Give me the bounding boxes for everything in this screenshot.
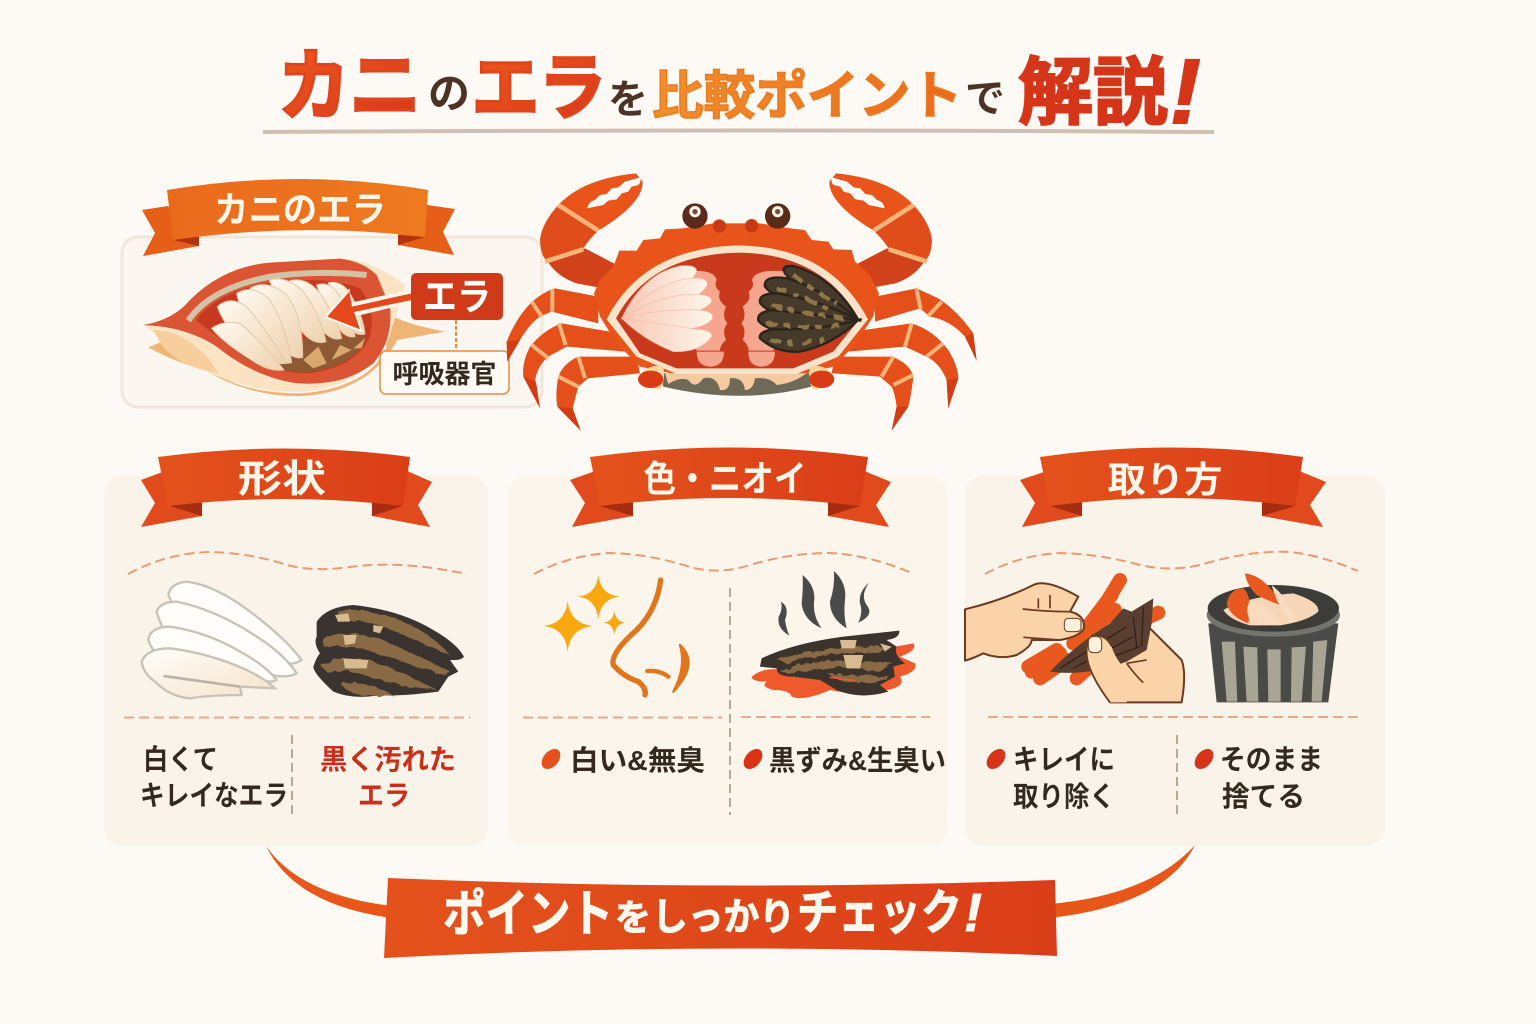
ribbon: shape heading: 形状 — [238, 459, 326, 501]
shell window — [607, 245, 868, 374]
pink lobes — [673, 271, 793, 367]
title: カニ — [278, 42, 421, 130]
ribbon: removal heading — [1020, 448, 1326, 527]
text: throw away — [1191, 744, 1323, 812]
dashed dividers — [523, 716, 930, 718]
title: エラ — [472, 49, 606, 129]
icon: trash can — [1207, 573, 1340, 702]
bottom banner: チェック — [797, 887, 962, 940]
icon: sparkles and nose — [544, 575, 689, 695]
text: remove cleanly: 取り除く — [1013, 781, 1115, 812]
connector line — [455, 320, 457, 350]
title: で — [965, 77, 1005, 121]
text: remove cleanly — [983, 744, 1115, 812]
text: dirty gill: エラ — [358, 780, 410, 811]
text: dark and smelly: 黒ずみ&生臭い — [769, 745, 946, 776]
title: 比較ポイント — [652, 68, 962, 126]
wavy divider — [534, 553, 914, 574]
icon: clean white gill — [142, 582, 302, 698]
dashed dividers — [124, 716, 470, 718]
illustration: crab — [507, 173, 977, 431]
panel: crab gill detail — [122, 237, 542, 407]
text: throw away: 捨てる — [1222, 781, 1305, 812]
icon: hands removing gill — [965, 580, 1184, 702]
front pincers — [638, 366, 834, 389]
label: gill: エラ — [423, 277, 491, 319]
ribbon: removal heading: 取り方 — [1108, 459, 1222, 500]
claws — [540, 173, 932, 288]
icon: smelly burnt gill — [752, 571, 915, 698]
icon: dirty black gill — [313, 605, 464, 697]
label: respiratory organ: 呼吸器官 — [392, 359, 496, 389]
title: を — [608, 78, 648, 122]
white gill — [622, 266, 713, 352]
text: throw away: そのまま — [1220, 744, 1323, 775]
bottom banner: を — [615, 897, 651, 938]
label: respiratory organ — [380, 351, 509, 394]
title: 解説 — [1018, 51, 1168, 134]
panel: shape — [104, 476, 488, 846]
bottom banner: ポイント — [443, 886, 613, 942]
leg tips and joints — [507, 289, 977, 431]
text: dirty gill — [320, 744, 456, 811]
bottom plate — [660, 373, 815, 396]
wavy divider — [985, 552, 1358, 574]
wavy divider — [128, 552, 467, 574]
arrow — [323, 288, 412, 333]
panel: removal — [965, 476, 1385, 846]
text: clean gill — [140, 744, 288, 811]
title: ! — [1170, 41, 1201, 143]
bottom banner: ! — [964, 883, 982, 943]
ribbon: color and smell heading — [570, 448, 891, 527]
bottom banner: しっかり — [652, 897, 795, 939]
dashed dividers — [988, 716, 1361, 718]
text: white and odorless: 白い&無臭 — [570, 745, 705, 776]
ribbon: color and smell heading: 色・ニオイ — [644, 458, 806, 499]
gill patches — [767, 275, 843, 343]
text: dirty gill: 黒く汚れた — [320, 744, 456, 775]
ribbon: crab gill heading — [142, 179, 455, 256]
text: remove cleanly: キレイに — [1013, 744, 1115, 775]
shell — [594, 223, 879, 377]
smoke — [778, 571, 869, 636]
ribbon: crab gill heading: カニのエラ — [214, 189, 386, 230]
text: clean gill: 白くて — [143, 744, 218, 775]
bottom banner — [384, 878, 1057, 958]
panel: color and smell — [508, 476, 947, 846]
illustration: gill cross-section — [143, 259, 445, 396]
title underline — [263, 130, 1214, 132]
title — [278, 41, 1201, 143]
title: の — [428, 70, 470, 117]
ribbon: shape heading — [141, 448, 432, 527]
text: clean gill: キレイなエラ — [140, 780, 288, 811]
dark gill — [758, 266, 858, 352]
bottom connector arcs — [266, 845, 1195, 918]
eyes and bumps — [682, 203, 790, 233]
legs — [507, 288, 977, 431]
